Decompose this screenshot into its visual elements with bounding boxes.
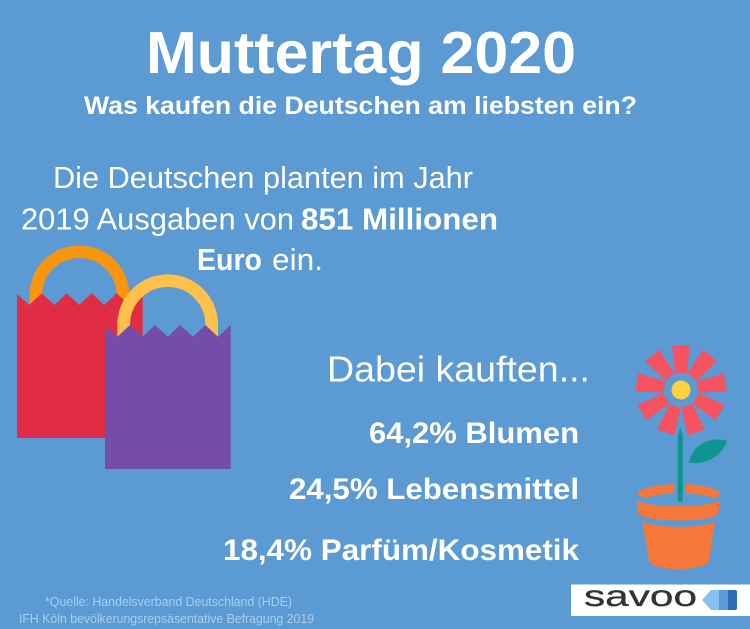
stem	[678, 427, 683, 502]
intro text block: 851 Millionen	[301, 202, 498, 236]
subtitle: Was kaufen die Deutschen am liebsten ein?	[84, 92, 637, 120]
pot body	[642, 522, 715, 569]
logo: savoo: savoo	[584, 580, 697, 613]
statistic: Lebensmittel: 24,5% Lebensmittel	[289, 473, 579, 506]
icon: red bag with orange handle	[17, 252, 143, 438]
intro text block: Euro	[197, 242, 262, 277]
heading: Dabei kauften: Dabei kauften...	[327, 348, 590, 390]
icon: purple bag with yellow handle	[105, 281, 231, 469]
icon: shopping bags	[17, 252, 231, 469]
leaf	[689, 440, 727, 463]
statistic: Parfüm/Kosmetik: 18,4% Parfüm/Kosmetik	[223, 534, 579, 567]
intro text block	[21, 160, 498, 277]
icon: flower in pot	[635, 345, 727, 569]
title: Muttertag 2020	[146, 20, 576, 86]
icon: blue tag	[702, 590, 737, 610]
intro text block: ein.	[272, 242, 323, 277]
source note: *Quelle: Handelsverband Deutschland (HDE)	[45, 595, 292, 609]
flower petals	[635, 345, 727, 435]
flower centre	[672, 380, 690, 400]
source note: IFH Köln bevölkerungsrepsäsentative Befragung 2019	[19, 612, 314, 626]
statistic: Blumen: 64,2% Blumen	[369, 417, 579, 450]
intro text block: 2019 Ausgaben von	[21, 202, 294, 236]
pot rim	[637, 484, 720, 498]
logo: savoo	[571, 580, 750, 616]
intro text block: Die Deutschen planten im Jahr	[53, 160, 473, 195]
source note	[19, 595, 314, 626]
